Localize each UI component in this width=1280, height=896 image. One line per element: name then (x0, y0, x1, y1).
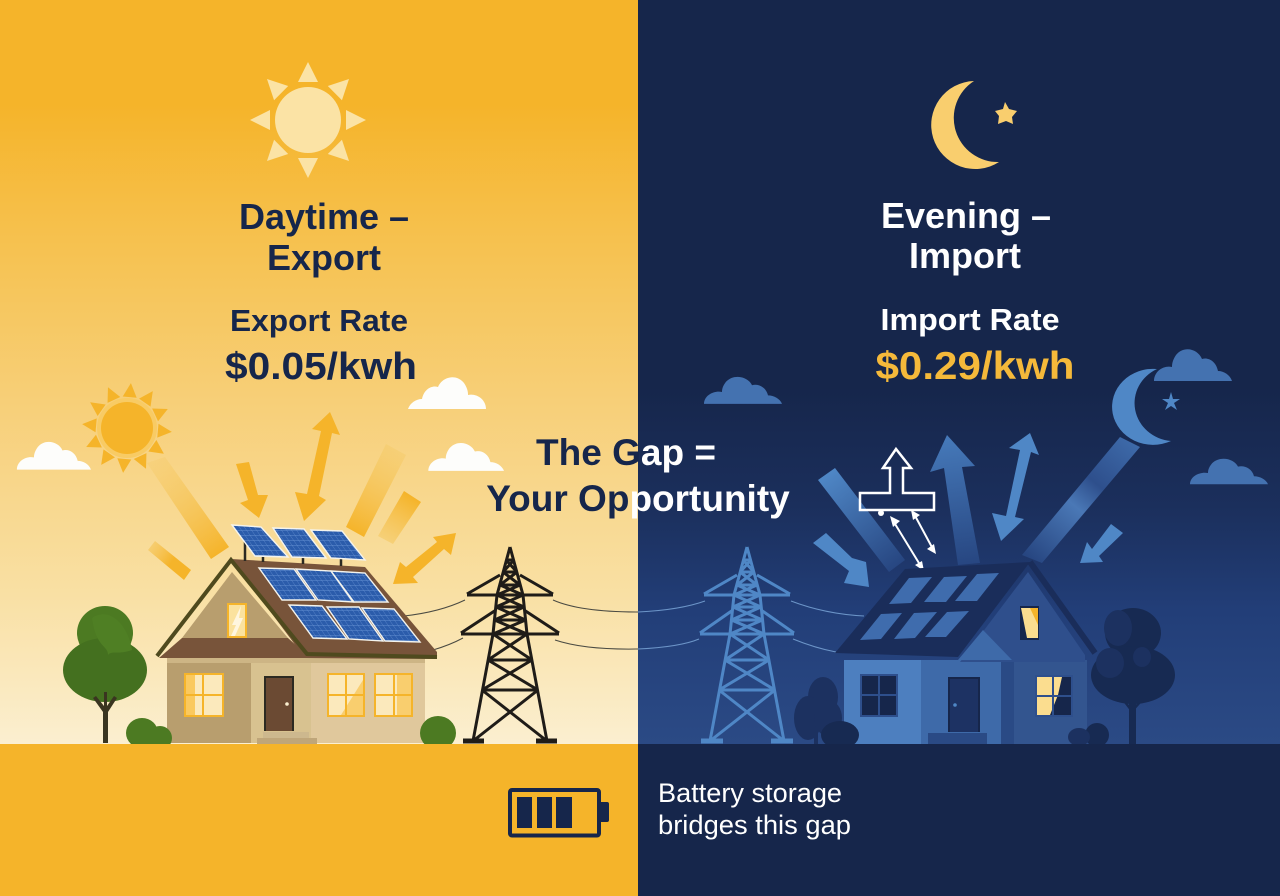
icons: white clouds (17, 377, 504, 471)
icon: small orange sun (82, 383, 172, 473)
icons: blue clouds (704, 349, 1268, 484)
daytime bushes (126, 716, 456, 750)
label: export rate: Export Rate (230, 303, 408, 338)
icon: daytime electricity pylon (461, 547, 559, 741)
band: daytime bottom (0, 744, 638, 896)
roof (835, 562, 1095, 657)
daytime tree (63, 606, 147, 743)
solar panels on roof (232, 525, 420, 642)
callout line one: The Gap = (536, 432, 716, 473)
sunlight beams and arrows (147, 412, 456, 584)
panel supports (245, 541, 341, 566)
steps (928, 733, 987, 745)
steps (257, 732, 317, 744)
band: evening bottom (638, 744, 1280, 896)
icon: large pale sun (250, 62, 366, 178)
evening large tree (1091, 608, 1175, 745)
value: import price: $0.29/kwh (876, 345, 1074, 388)
icon: white grid-flow arrow outline (860, 449, 936, 571)
heading: daytime export: Daytime – (239, 196, 409, 237)
door (948, 677, 980, 732)
wires: daytime (404, 600, 638, 650)
daytime house with solar panels (157, 525, 437, 744)
windows (184, 673, 413, 717)
caption: battery storage: Battery storage (658, 778, 842, 808)
evening small tree and bushes (794, 677, 1109, 749)
wires: evening (638, 601, 864, 652)
gable window (227, 603, 247, 638)
heading: daytime export: Export (267, 237, 381, 278)
icon: battery (510, 790, 609, 836)
center callout: the gap (486, 432, 790, 519)
panel: daytime background (0, 0, 638, 744)
panel: evening background (638, 0, 1280, 744)
heading: evening import: Import (909, 235, 1021, 276)
roof panels (860, 573, 999, 640)
caption: battery storage: bridges this gap (658, 810, 851, 840)
icon: gold crescent moon and star (931, 81, 1017, 169)
moonlight beams and arrows (813, 433, 1140, 587)
value: export price: $0.05/kwh (225, 346, 417, 388)
label: import rate: Import Rate (880, 302, 1060, 337)
icon: blue crescent moon and star (1112, 369, 1180, 445)
door (264, 676, 294, 731)
roof (157, 559, 437, 659)
callout line two: Your Opportunity (486, 478, 790, 519)
lit window upper (1020, 606, 1039, 640)
heading: evening import: Evening – (881, 195, 1051, 236)
dark window (860, 674, 898, 717)
evening house (835, 562, 1095, 745)
lit window lower (1035, 675, 1073, 717)
icon: evening electricity pylon (700, 547, 794, 741)
